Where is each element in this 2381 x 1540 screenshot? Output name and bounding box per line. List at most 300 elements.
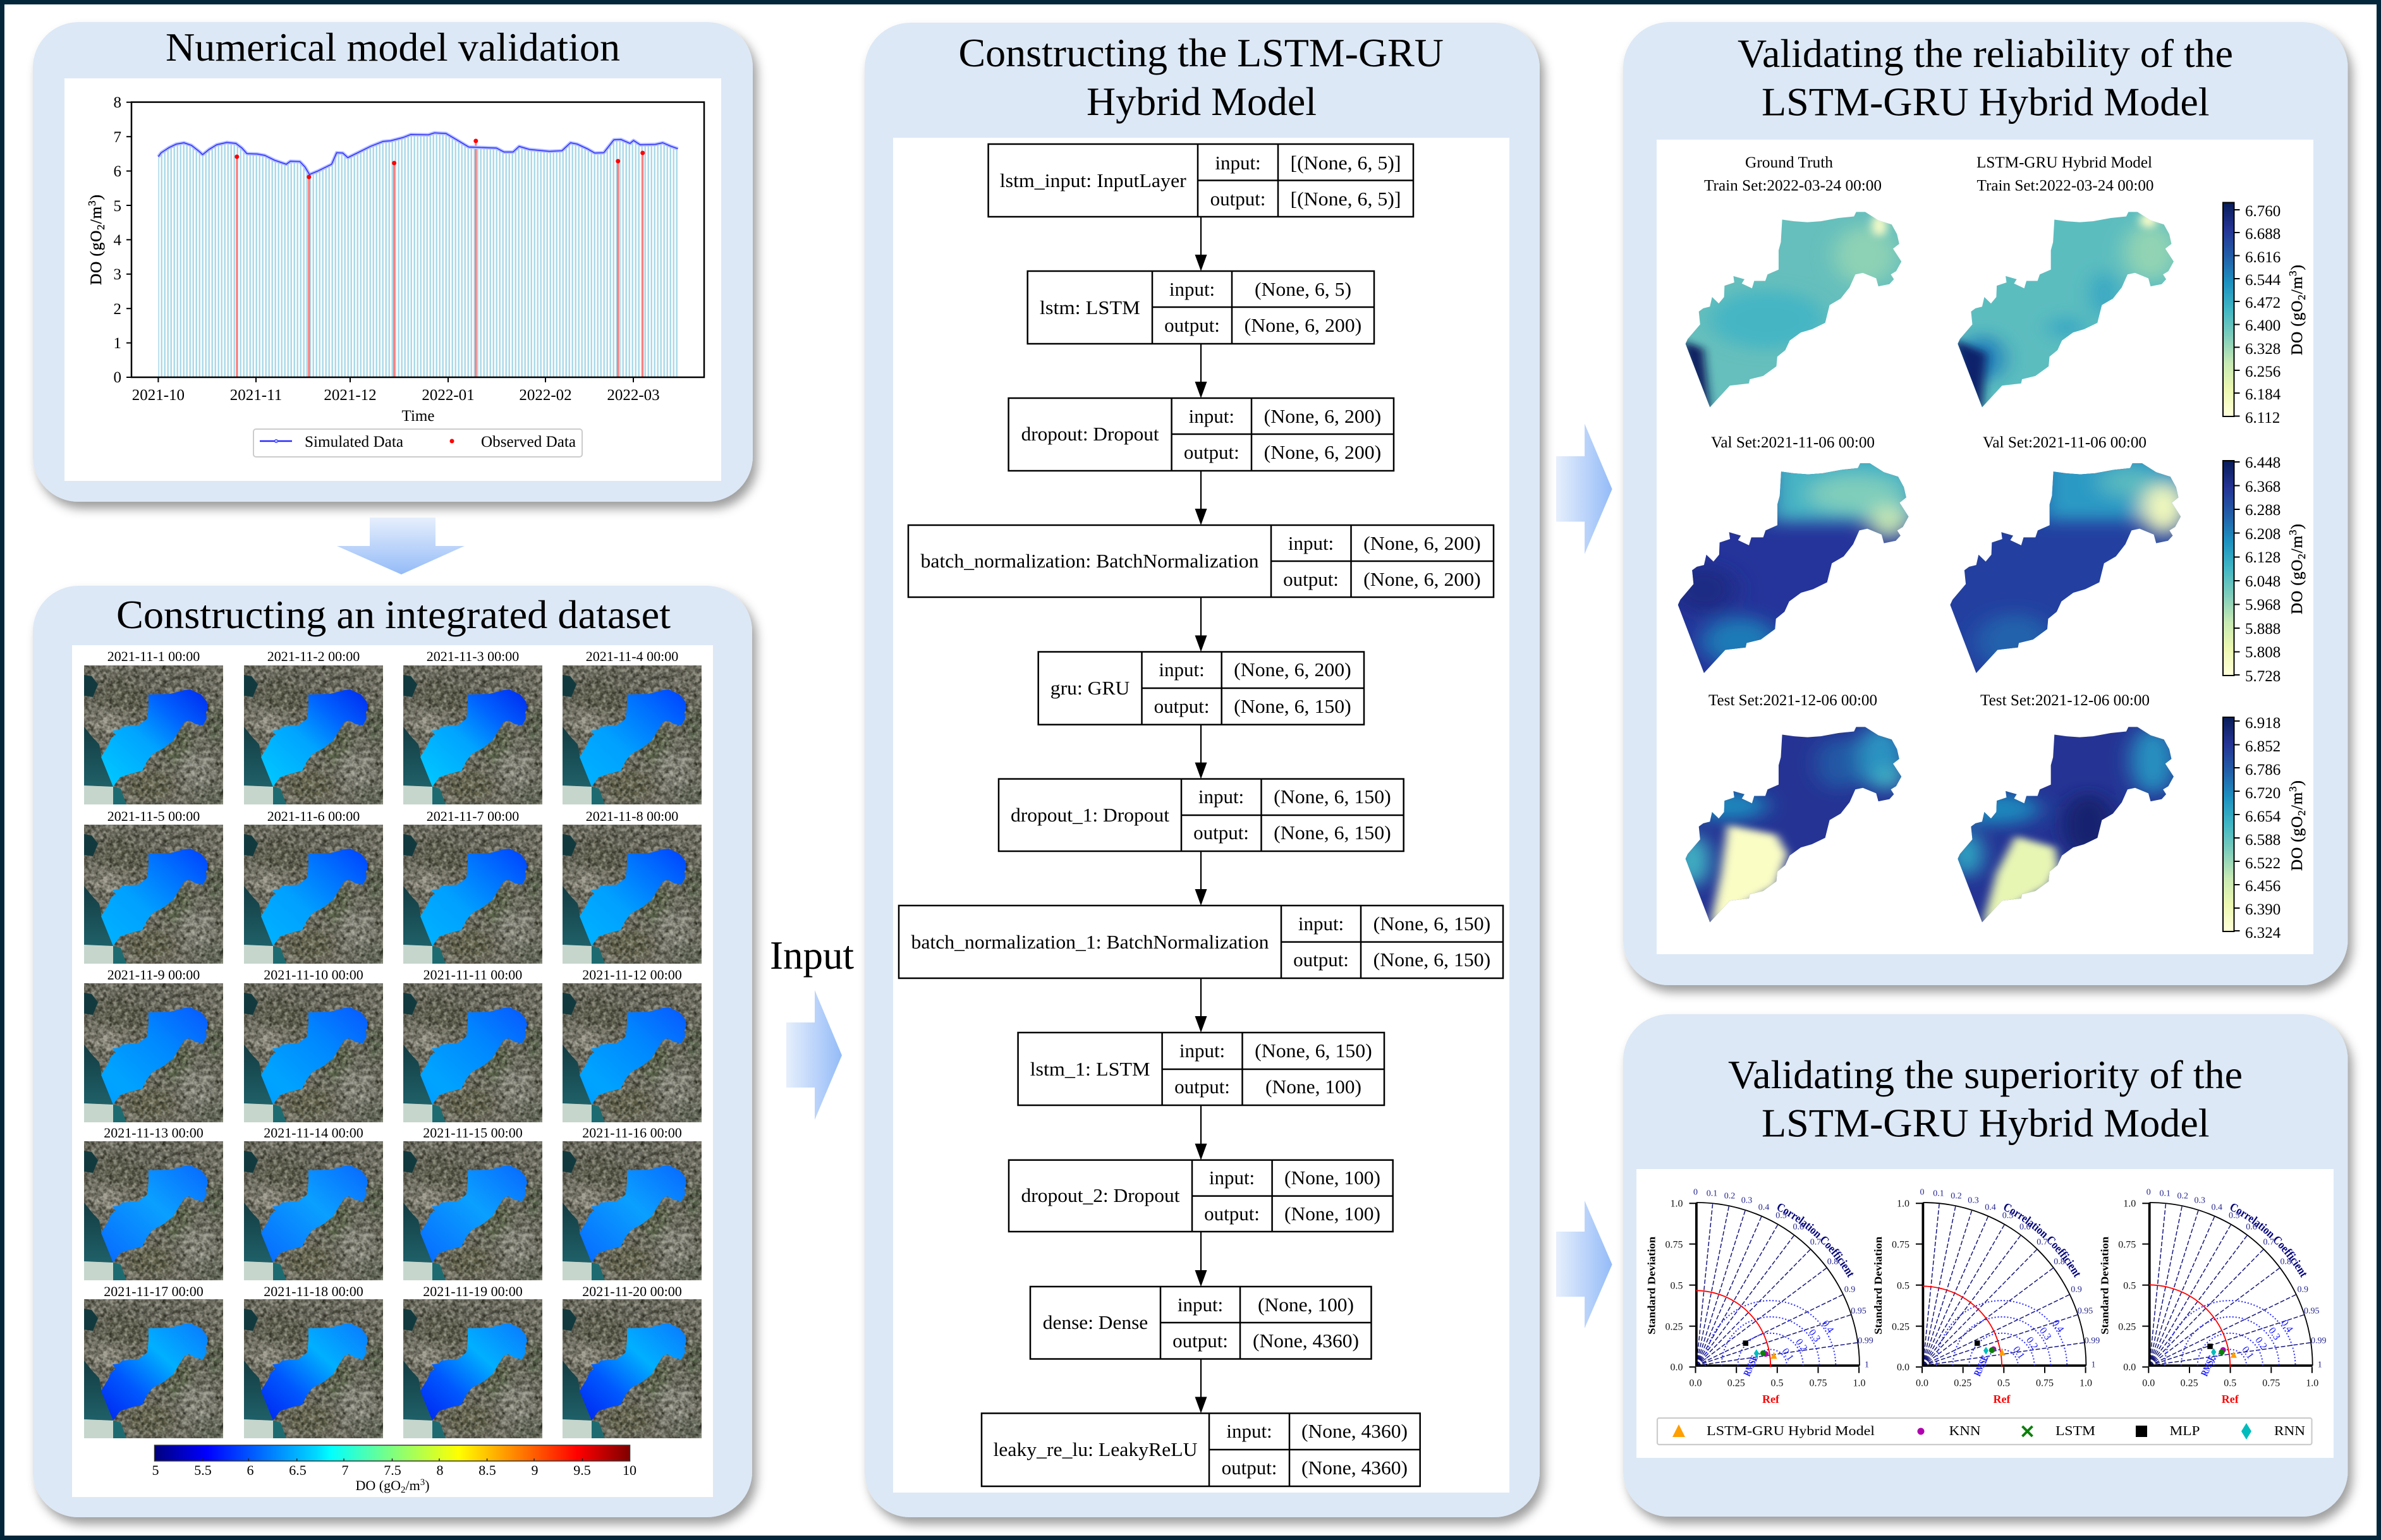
legend: models: KNN xyxy=(1949,1423,1981,1438)
taylor diagram 1: 1.0 xyxy=(1853,1378,1866,1388)
layer: dense: output: xyxy=(1172,1330,1228,1352)
layer: lstm_input: lstm_input: InputLayer xyxy=(1000,169,1186,191)
panel: validating the reliability xyxy=(1623,22,2348,985)
taylor diagram 2: 0.5 xyxy=(1997,1378,2010,1388)
taylor diagram 1: 0.7 xyxy=(1810,1237,1821,1247)
layer: dropout: input: xyxy=(1189,405,1234,427)
taylor diagram 3: Standard Deviation xyxy=(2098,1236,2110,1335)
taylor diagram 3: Correlation Coefficient xyxy=(2230,1203,2307,1278)
arrow: dataset to model xyxy=(786,990,842,1120)
taylor diagram 3: 0.1 xyxy=(2160,1189,2171,1198)
colorbar: DO jet scale: 10 xyxy=(623,1462,636,1478)
map: test hybrid model xyxy=(1938,718,2186,931)
layer: dropout_2: (None, 100) xyxy=(1284,1167,1380,1189)
arrow: model to superiority validation xyxy=(1556,1201,1612,1328)
taylor diagram 3: 1 xyxy=(2318,1360,2322,1369)
colorbar: test: 3 xyxy=(2287,785,2299,792)
map: validation ground truth xyxy=(1657,451,1922,682)
legend: models: RNN xyxy=(2274,1423,2305,1438)
layer: dropout: dropout: Dropout xyxy=(1021,423,1159,445)
layer: gru: output: xyxy=(1154,695,1210,717)
layer: dense: (None, 4360) xyxy=(1253,1330,1359,1352)
taylor diagram 2: 0 xyxy=(1920,1187,1924,1197)
layer: dropout: (None, 6, 200) xyxy=(1264,441,1381,463)
taylor diagram 3: 1.0 xyxy=(2123,1198,2136,1209)
taylor diagram 1: 0.4 xyxy=(1758,1203,1769,1212)
colorbar: test: 6.522 xyxy=(2245,855,2281,872)
layer: leaky_re_lu: (None, 4360) xyxy=(1301,1457,1408,1479)
colorbar: validation: 5.728 xyxy=(2245,668,2281,685)
taylor diagram 2: RMSE xyxy=(1972,1354,1991,1378)
heading: constructing the LSTM-GRU hybrid model: Hybrid Model xyxy=(1087,79,1317,124)
label: Input: Input xyxy=(770,933,854,978)
arrow: numerical model to dataset xyxy=(337,518,465,574)
taylor diagram 1: 0.3 xyxy=(1741,1196,1752,1205)
legend: models: MLP xyxy=(2169,1423,2200,1438)
taylor diagram 3: 0.2 xyxy=(2253,1335,2269,1352)
taylor diagram 3: 0.75 xyxy=(2118,1239,2136,1250)
colorbar: validation: 6.368 xyxy=(2245,478,2281,495)
axes: 8 xyxy=(114,94,121,111)
taylor diagram 3: 0.25 xyxy=(2118,1321,2136,1332)
panel: constructing the LSTM-GRU hybrid model xyxy=(865,23,1540,1517)
panel: constructing an integrated dataset xyxy=(33,586,752,1517)
axes: DO (gO xyxy=(88,230,105,285)
colorbar: validation: /m xyxy=(2289,535,2306,553)
colorbar: train: 6.328 xyxy=(2245,341,2281,358)
prediction map comparison xyxy=(1657,140,2313,954)
axes: 6 xyxy=(114,163,121,180)
map row 5: 2021-11-18 00:00 xyxy=(264,1283,363,1299)
heading: constructing the LSTM-GRU hybrid model: Constructing the LSTM-GRU xyxy=(958,30,1444,75)
arrow: model to reliability validation xyxy=(1556,423,1612,554)
taylor diagram 2: 0.75 xyxy=(1892,1239,1909,1250)
axes: 3 xyxy=(114,266,121,283)
taylor diagram 2: 0.6 xyxy=(2019,1222,2030,1232)
taylor diagram 2: 0.3 xyxy=(2037,1326,2053,1342)
taylor diagram 2: 0.1 xyxy=(1933,1189,1944,1198)
layer: batch_normalization: output: xyxy=(1283,568,1339,590)
axes: ) xyxy=(88,194,105,200)
taylor diagram 2: 0.75 xyxy=(2036,1378,2054,1388)
taylor diagram 2: 0.8 xyxy=(2054,1257,2065,1266)
layer: gru: (None, 6, 150) xyxy=(1234,695,1351,717)
taylor diagram 1: 0.25 xyxy=(1665,1321,1683,1332)
colorbar: validation: DO (gO xyxy=(2289,559,2306,614)
taylor diagram 3: 0 xyxy=(2147,1187,2151,1197)
colorbar: validation: 6.448 xyxy=(2245,454,2281,471)
taylor diagram 3: 0.6 xyxy=(2246,1222,2257,1232)
map row 4: 2021-11-15 00:00 xyxy=(423,1125,523,1141)
colorbar: DO jet scale xyxy=(152,1445,636,1495)
taylor diagram 3: Ref xyxy=(2222,1393,2239,1405)
taylor diagram 2: 1.0 xyxy=(2080,1378,2092,1388)
colorbar: train: 6.256 xyxy=(2245,363,2281,380)
layer: batch_normalization_1 xyxy=(899,906,1503,978)
colorbar: DO jet scale: DO (gO xyxy=(355,1477,401,1493)
taylor diagram 1 xyxy=(1646,1187,1873,1405)
map row 3: 2021-11-10 00:00 xyxy=(264,967,363,983)
taylor diagram 1: 1.0 xyxy=(1670,1198,1683,1209)
layer: dropout_1: input: xyxy=(1198,785,1244,808)
simulated data line xyxy=(158,133,678,174)
taylor diagram 3: 0.0 xyxy=(2123,1362,2136,1373)
map row 4: 2021-11-16 00:00 xyxy=(582,1125,682,1141)
map row 5: 2021-11-20 00:00 xyxy=(582,1283,682,1299)
layer: gru: (None, 6, 200) xyxy=(1234,658,1351,681)
taylor diagram 2: Correlation Coefficient xyxy=(2004,1203,2081,1278)
axes: 2021-10 xyxy=(132,387,185,404)
taylor diagram 2: 0.0 xyxy=(1897,1362,1909,1373)
colorbar: train: 6.616 xyxy=(2245,249,2281,266)
taylor diagram 1: 0.5 xyxy=(1670,1280,1683,1291)
map: train hybrid model xyxy=(1938,203,2186,416)
colorbar: train: ) xyxy=(2289,264,2306,270)
map row 5: 2021-11-19 00:00 xyxy=(423,1283,523,1299)
heading: validating the superiority xyxy=(1728,1052,2243,1145)
colorbar: train xyxy=(2223,202,2308,427)
taylor diagram 3: 0.5 xyxy=(2224,1378,2236,1388)
taylor diagram 1: 0.75 xyxy=(1665,1239,1683,1250)
layer: lstm_1: output: xyxy=(1174,1076,1230,1098)
colorbar: test: ) xyxy=(2289,780,2306,785)
heading: validating the superiority: Validating the superiority of the xyxy=(1728,1052,2243,1097)
axes: 1 xyxy=(114,335,121,352)
heading: constructing an integrated dataset: Constructing an integrated dataset xyxy=(116,592,671,637)
colorbar: train: 3 xyxy=(2287,270,2299,276)
colorbar: DO jet scale: 5.5 xyxy=(194,1462,212,1478)
axes: Time xyxy=(402,408,434,425)
panel: validating the superiority xyxy=(1623,1014,2348,1517)
layer: batch_normalization_1: output: xyxy=(1293,949,1349,971)
taylor diagram 2: 0.3 xyxy=(1968,1196,1979,1205)
colorbar: validation: 6.128 xyxy=(2245,549,2281,566)
layer: dense: dense: Dense xyxy=(1043,1311,1148,1333)
colorbar: DO jet scale: 7.5 xyxy=(384,1462,401,1478)
map row 1 xyxy=(84,648,711,811)
colorbar: DO jet scale: 3 xyxy=(420,1477,425,1488)
colorbar: DO jet scale: 6 xyxy=(247,1462,254,1478)
layer: gru: input: xyxy=(1159,658,1205,681)
heading: numerical model validation: Numerical model validation xyxy=(166,25,620,70)
map row 1: 2021-11-3 00:00 xyxy=(427,648,519,664)
taylor diagram 3: 0.75 xyxy=(2262,1378,2280,1388)
map row 3 xyxy=(84,967,711,1129)
map titles: Test Set:2021-12-06 00:00 xyxy=(1708,692,1877,709)
layer: dense: (None, 100) xyxy=(1258,1294,1354,1316)
taylor diagram 1: Standard Deviation xyxy=(1646,1236,1657,1335)
colorbar: validation xyxy=(2223,454,2308,685)
taylor diagram 3 xyxy=(2098,1187,2327,1405)
colorbar: test: 2 xyxy=(2296,809,2308,816)
colorbar: DO jet scale: 8.5 xyxy=(478,1462,496,1478)
map titles xyxy=(1704,154,2154,709)
layer: dropout_1 xyxy=(999,779,1404,851)
taylor diagram 2: Ref xyxy=(1994,1393,2011,1405)
layer: lstm: (None, 6, 5) xyxy=(1255,278,1351,300)
taylor diagram 2: 0.4 xyxy=(1985,1203,1996,1212)
taylor diagram 3: 0.5 xyxy=(2123,1280,2136,1291)
map row 1: 2021-11-1 00:00 xyxy=(107,648,200,664)
taylor diagram 2: 0.1 xyxy=(2011,1345,2026,1361)
axes: 2022-02 xyxy=(519,387,572,404)
colorbar: validation: 6.048 xyxy=(2245,573,2281,590)
axes: 4 xyxy=(114,232,121,249)
taylor diagram 2: 0.95 xyxy=(2078,1306,2093,1316)
map row 5 xyxy=(84,1283,711,1445)
layer: batch_normalization_1: batch_normalization_1: BatchNormalization xyxy=(911,931,1269,953)
white inset for taylor diagrams xyxy=(1636,1169,2334,1458)
colorbar: test: /m xyxy=(2289,792,2306,809)
taylor diagram 1: 0.5 xyxy=(1771,1378,1784,1388)
map row 3: 2021-11-9 00:00 xyxy=(107,967,200,983)
layer: lstm_1 xyxy=(1018,1033,1384,1105)
map titles: Val Set:2021-11-06 00:00 xyxy=(1711,434,1875,451)
colorbar: train: DO (gO xyxy=(2289,300,2306,355)
colorbar: validation: 6.288 xyxy=(2245,502,2281,519)
colorbar: train: 6.112 xyxy=(2245,409,2280,427)
layer: leaky_re_lu: (None, 4360) xyxy=(1301,1420,1408,1442)
layer: lstm: (None, 6, 200) xyxy=(1245,314,1361,336)
layer: dropout_2: input: xyxy=(1209,1167,1255,1189)
map titles: Train Set:2022-03-24 00:00 xyxy=(1704,178,1882,195)
taylor diagram 3: 0.4 xyxy=(2212,1203,2222,1212)
colorbar: validation: 5.888 xyxy=(2245,621,2281,638)
taylor diagram 1: Correlation Coefficient xyxy=(1777,1203,1854,1278)
heading: validating the reliability: LSTM-GRU Hybrid Model xyxy=(1762,80,2210,124)
colorbar: test: 6.324 xyxy=(2245,925,2281,942)
taylor diagram 1: 0.1 xyxy=(1707,1189,1717,1198)
layer: lstm_input: [(None, 6, 5)] xyxy=(1291,188,1401,210)
taylor diagram 1: 0.2 xyxy=(1724,1191,1735,1201)
chart: simulated and observed DO time series xyxy=(64,78,721,481)
taylor diagram 3: 0.95 xyxy=(2304,1306,2320,1316)
map row 1: 2021-11-4 00:00 xyxy=(586,648,678,664)
axes: 0 xyxy=(114,369,121,386)
map: validation hybrid model xyxy=(1929,451,2194,682)
axes: /m xyxy=(88,206,105,224)
layer: dropout_2: output: xyxy=(1204,1203,1260,1225)
colorbar: train: 6.400 xyxy=(2245,317,2281,334)
colorbar: train: 6.544 xyxy=(2245,272,2281,289)
layer: dropout_1: (None, 6, 150) xyxy=(1274,822,1391,844)
layer: dropout_2: (None, 100) xyxy=(1284,1203,1380,1225)
layer: dropout_1: dropout_1: Dropout xyxy=(1011,804,1169,826)
layer: gru: gru: GRU xyxy=(1050,677,1130,699)
layer: lstm_input: [(None, 6, 5)] xyxy=(1291,152,1401,174)
map: test ground truth xyxy=(1665,718,1914,931)
layer: lstm: input: xyxy=(1169,278,1215,300)
taylor diagram 1: 0.0 xyxy=(1670,1362,1683,1373)
taylor diagram 3: 0.25 xyxy=(2181,1378,2198,1388)
colorbar: test: 6.390 xyxy=(2245,901,2281,918)
panel: numerical model validation xyxy=(33,22,753,502)
taylor diagram 1: 0.0 xyxy=(1689,1378,1702,1388)
taylor diagram 2: 0.2 xyxy=(1951,1191,1962,1201)
colorbar: test: 6.588 xyxy=(2245,832,2281,849)
map row 2: 2021-11-7 00:00 xyxy=(427,808,519,824)
colorbar: validation: 6.208 xyxy=(2245,526,2281,543)
taylor diagram 1: RMSE xyxy=(1742,1354,1760,1378)
layer: lstm_1: (None, 6, 150) xyxy=(1255,1040,1372,1062)
axes: 2022-03 xyxy=(607,387,660,404)
layer: leaky_re_lu: output: xyxy=(1222,1457,1277,1479)
layer: dense: input: xyxy=(1178,1294,1223,1316)
colorbar: validation: ) xyxy=(2289,523,2306,529)
map titles: Train Set:2022-03-24 00:00 xyxy=(1977,178,2154,195)
layer: leaky_re_lu: input: xyxy=(1226,1420,1272,1442)
layer: lstm_1: lstm_1: LSTM xyxy=(1030,1058,1150,1080)
colorbar: test xyxy=(2223,715,2308,942)
layer: dropout_2 xyxy=(1009,1160,1393,1232)
axes: 2021-12 xyxy=(324,387,377,404)
model architecture diagram xyxy=(893,138,1509,1493)
layer: batch_normalization xyxy=(908,525,1494,597)
colorbar: train: 6.760 xyxy=(2245,203,2281,220)
taylor diagram 2: 1 xyxy=(2091,1360,2096,1369)
colorbar: test: 6.720 xyxy=(2245,785,2281,802)
layer: lstm xyxy=(1028,271,1374,344)
taylor diagram 1: 0.6 xyxy=(1793,1222,1804,1232)
map: train ground truth xyxy=(1665,203,1914,416)
legend xyxy=(253,429,582,457)
axes: 2 xyxy=(95,224,107,230)
colorbar: train: 2 xyxy=(2296,294,2308,300)
taylor diagram 2: 1.0 xyxy=(1897,1198,1909,1209)
taylor diagram 3: 0.5 xyxy=(2229,1211,2240,1220)
map row 1: 2021-11-2 00:00 xyxy=(267,648,360,664)
legend: Simulated Data xyxy=(305,434,403,451)
legend: Observed Data xyxy=(481,434,576,451)
layer: lstm_1: (None, 100) xyxy=(1265,1076,1361,1098)
taylor diagram 3: 0.0 xyxy=(2142,1378,2155,1388)
taylor diagram 3: 0.9 xyxy=(2298,1285,2308,1294)
taylor diagram 1: 0.25 xyxy=(1727,1378,1745,1388)
layer: batch_normalization: batch_normalization: BatchNormalization xyxy=(920,550,1259,572)
map row 2: 2021-11-5 00:00 xyxy=(107,808,200,824)
layer: leaky_re_lu xyxy=(982,1413,1420,1486)
colorbar: test: 6.456 xyxy=(2245,878,2281,895)
taylor diagram 2: 0.9 xyxy=(2071,1285,2082,1294)
taylor diagram 1: 0 xyxy=(1693,1187,1698,1197)
taylor diagram 3: 0.3 xyxy=(2266,1326,2282,1342)
taylor diagram 1: 0.1 xyxy=(1779,1347,1796,1363)
taylor diagram 1: 1 xyxy=(1865,1360,1869,1369)
layer: gru xyxy=(1038,652,1364,725)
taylor diagram 1: 0.9 xyxy=(1844,1285,1855,1294)
taylor diagram 2: 0.5 xyxy=(2002,1211,2013,1220)
taylor diagram 2: 0.25 xyxy=(1954,1378,1971,1388)
taylor diagram 2 xyxy=(1872,1187,2100,1405)
colorbar: validation: 2 xyxy=(2296,553,2308,559)
colorbar: test: 6.786 xyxy=(2245,761,2281,779)
taylor diagram 1: 0.95 xyxy=(1851,1306,1866,1316)
layer: dropout_2: dropout_2: Dropout xyxy=(1021,1184,1180,1206)
colorbar: DO jet scale: 9 xyxy=(531,1462,539,1478)
taylor diagram 2: 0.4 xyxy=(2050,1318,2066,1335)
white inset with map grid xyxy=(72,645,713,1497)
layer: leaky_re_lu: leaky_re_lu: LeakyReLU xyxy=(994,1438,1197,1460)
layer: lstm: output: xyxy=(1164,314,1220,336)
layer: dropout_1: (None, 6, 150) xyxy=(1274,785,1391,808)
observed data points xyxy=(234,139,645,179)
taylor diagram 1: 0.75 xyxy=(1809,1378,1827,1388)
taylor diagram 2: 0.0 xyxy=(1916,1378,1928,1388)
layer: lstm: lstm: LSTM xyxy=(1040,296,1140,318)
layer arrows xyxy=(1195,217,1207,1413)
layer: batch_normalization: (None, 6, 200) xyxy=(1363,568,1481,590)
taylor diagram 3: RMSE xyxy=(2200,1354,2218,1378)
colorbar: DO jet scale: 9.5 xyxy=(573,1462,591,1478)
colorbar: validation: 3 xyxy=(2287,529,2299,535)
taylor diagram 3: 0.4 xyxy=(2279,1318,2295,1335)
map titles: LSTM-GRU Hybrid Model xyxy=(1976,154,2152,171)
taylor diagram 3: 0.2 xyxy=(2177,1191,2188,1201)
axes: 5 xyxy=(114,198,121,215)
colorbar: DO jet scale: /m xyxy=(405,1477,420,1493)
map row 2: 2021-11-6 00:00 xyxy=(267,808,360,824)
colorbar: DO jet scale: ) xyxy=(425,1477,430,1493)
layer: batch_normalization_1: (None, 6, 150) xyxy=(1373,912,1490,935)
taylor diagram 2: 0.7 xyxy=(2037,1237,2048,1247)
legend: models: LSTM-GRU Hybrid Model xyxy=(1707,1423,1875,1438)
taylor diagram 3: 0.8 xyxy=(2281,1257,2291,1266)
map row 4: 2021-11-14 00:00 xyxy=(264,1125,363,1141)
axes: 2 xyxy=(114,301,121,318)
colorbar: validation: 5.968 xyxy=(2245,597,2281,614)
colorbar: DO jet scale: 8 xyxy=(436,1462,444,1478)
layer: lstm_input: input: xyxy=(1215,152,1261,174)
layer: dense xyxy=(1030,1287,1372,1359)
taylor diagram 3: 0.7 xyxy=(2263,1237,2274,1247)
colorbar: train: 6.688 xyxy=(2245,226,2281,243)
taylor diagram 2: 0.99 xyxy=(2085,1336,2100,1345)
colorbar: DO jet scale: 5 xyxy=(152,1462,159,1478)
taylor diagram 1: 0.8 xyxy=(1827,1257,1838,1266)
map row 4 xyxy=(84,1125,711,1287)
taylor diagram 1: 0.99 xyxy=(1858,1336,1873,1345)
taylor diagram 3: 0.1 xyxy=(2239,1345,2256,1361)
layer: lstm_input: output: xyxy=(1210,188,1265,210)
taylor diagram 2: 0.5 xyxy=(1897,1280,1909,1291)
colorbar: test: 6.918 xyxy=(2245,715,2281,732)
colorbar: train: 6.472 xyxy=(2245,294,2281,312)
colorbar: test: 6.852 xyxy=(2245,738,2281,755)
taylor diagram 2: Standard Deviation xyxy=(1872,1236,1884,1335)
taylor diagram 3: 1.0 xyxy=(2306,1378,2318,1388)
taylor diagram 2: 0.25 xyxy=(1892,1321,1909,1332)
taylor diagram 1: 0.3 xyxy=(1806,1328,1822,1344)
taylor diagram 1: 0.2 xyxy=(1793,1337,1809,1354)
taylor diagram 2: 0.2 xyxy=(2024,1335,2040,1352)
axes: 2021-11 xyxy=(230,387,282,404)
colorbar: test: 6.654 xyxy=(2245,808,2281,825)
map row 5: 2021-11-17 00:00 xyxy=(104,1283,204,1299)
layer: batch_normalization_1: input: xyxy=(1298,912,1344,935)
taylor diagram 1: Ref xyxy=(1762,1393,1780,1405)
colorbar: train: /m xyxy=(2289,276,2306,294)
colorbar: validation: 5.808 xyxy=(2245,644,2281,661)
layer: dropout: output: xyxy=(1184,441,1239,463)
axes: 7 xyxy=(114,129,121,146)
taylor diagram 1: 0.4 xyxy=(1820,1319,1836,1335)
colorbar: DO jet scale: 6.5 xyxy=(289,1462,307,1478)
map titles: Ground Truth xyxy=(1745,154,1834,171)
heading: validating the reliability xyxy=(1738,31,2233,124)
map row 3: 2021-11-12 00:00 xyxy=(582,967,682,983)
heading: validating the superiority: LSTM-GRU Hybrid Model xyxy=(1762,1101,2210,1145)
layer: dropout: (None, 6, 200) xyxy=(1264,405,1381,427)
